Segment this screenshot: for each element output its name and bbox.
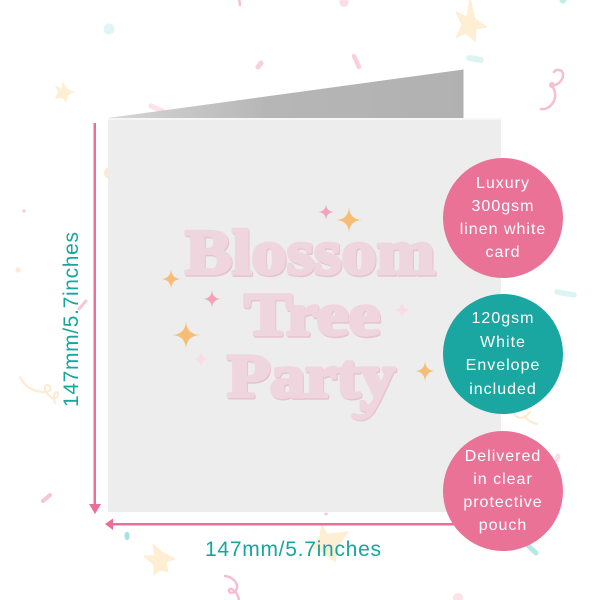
width label: 147mm/5.7inches — [205, 538, 381, 561]
badge: card material: 300gsm — [472, 198, 534, 215]
card title: Blossom — [186, 218, 436, 289]
badge: delivery: in clear — [473, 471, 533, 488]
badge: card material: Luxury — [476, 175, 530, 192]
badge: card material: card — [485, 244, 521, 261]
badge: envelope: 120gsm — [472, 310, 534, 327]
card title: Party — [227, 344, 395, 410]
width arrow — [105, 518, 455, 530]
card title — [185, 216, 436, 418]
badge: envelope: Envelope — [466, 357, 540, 374]
badge: envelope — [443, 294, 563, 414]
card title: Tree — [245, 283, 381, 349]
badge: envelope: White — [480, 334, 526, 351]
card back panel — [108, 70, 464, 118]
badge: card material — [443, 158, 563, 278]
card front — [108, 118, 501, 512]
badge: envelope: included — [469, 381, 537, 398]
badge: delivery — [443, 431, 563, 551]
sparkles — [161, 204, 435, 382]
badge: delivery: protective — [463, 494, 543, 511]
card title: Tree — [244, 282, 380, 348]
badge: delivery: Delivered — [465, 448, 541, 465]
card title: Party — [228, 345, 396, 412]
height arrow — [89, 123, 101, 514]
badge: delivery: pouch — [479, 517, 527, 534]
confetti dash over height label — [79, 301, 86, 309]
height label: 147mm/5.7inches — [60, 232, 83, 407]
card title: Blossom — [185, 216, 435, 288]
badge: card material: linen white — [460, 221, 546, 238]
